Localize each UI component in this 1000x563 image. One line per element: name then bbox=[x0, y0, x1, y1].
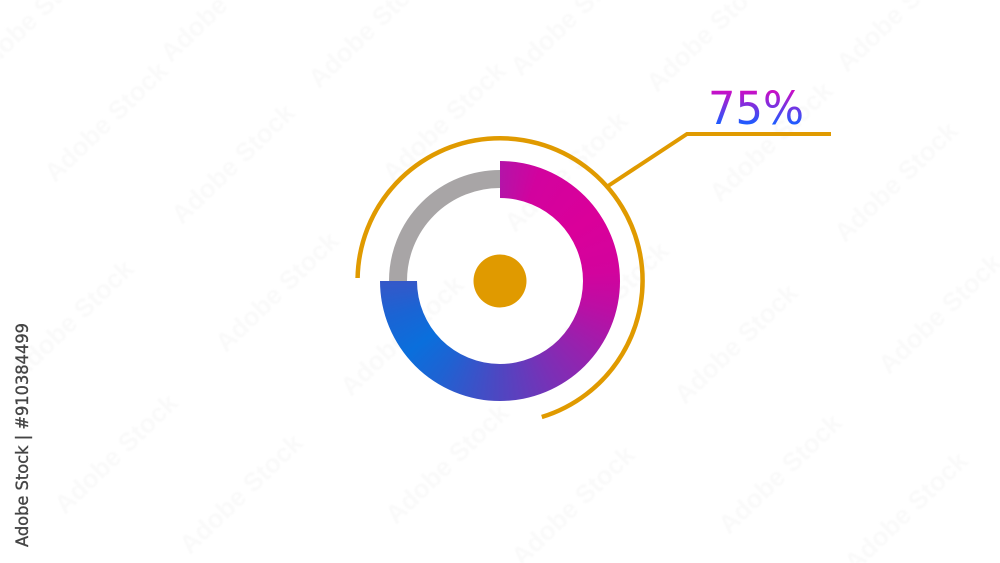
outer orange arc bbox=[358, 138, 643, 417]
watermark pattern: Adobe Stock bbox=[334, 269, 470, 402]
donut value ring: 75% gradient bbox=[380, 161, 620, 402]
side credit text: Adobe Stock | #910384499 bbox=[13, 323, 33, 547]
watermark pattern: Adobe Stock bbox=[498, 105, 634, 238]
center dot bbox=[474, 254, 526, 308]
watermark pattern: Adobe Stock bbox=[376, 55, 512, 188]
watermark pattern: Adobe Stock bbox=[539, 235, 675, 368]
watermark pattern: Adobe Stock bbox=[828, 115, 964, 248]
watermark pattern: Adobe Stock bbox=[165, 97, 301, 230]
watermark pattern: Adobe Stock bbox=[712, 407, 848, 540]
leader line bbox=[608, 134, 831, 186]
watermark pattern: Adobe Stock bbox=[703, 75, 839, 208]
watermark pattern: Adobe Stock bbox=[668, 277, 804, 410]
watermark pattern: Adobe Stock bbox=[209, 225, 345, 358]
watermark pattern: Adobe Stock bbox=[48, 387, 184, 520]
watermark pattern: Adobe Stock bbox=[38, 55, 174, 188]
watermark pattern: Adobe Stock bbox=[4, 253, 140, 386]
percentage label: 75% bbox=[708, 82, 804, 135]
watermark pattern: Adobe Stock bbox=[173, 427, 309, 560]
watermark pattern: Adobe Stock bbox=[379, 397, 515, 530]
